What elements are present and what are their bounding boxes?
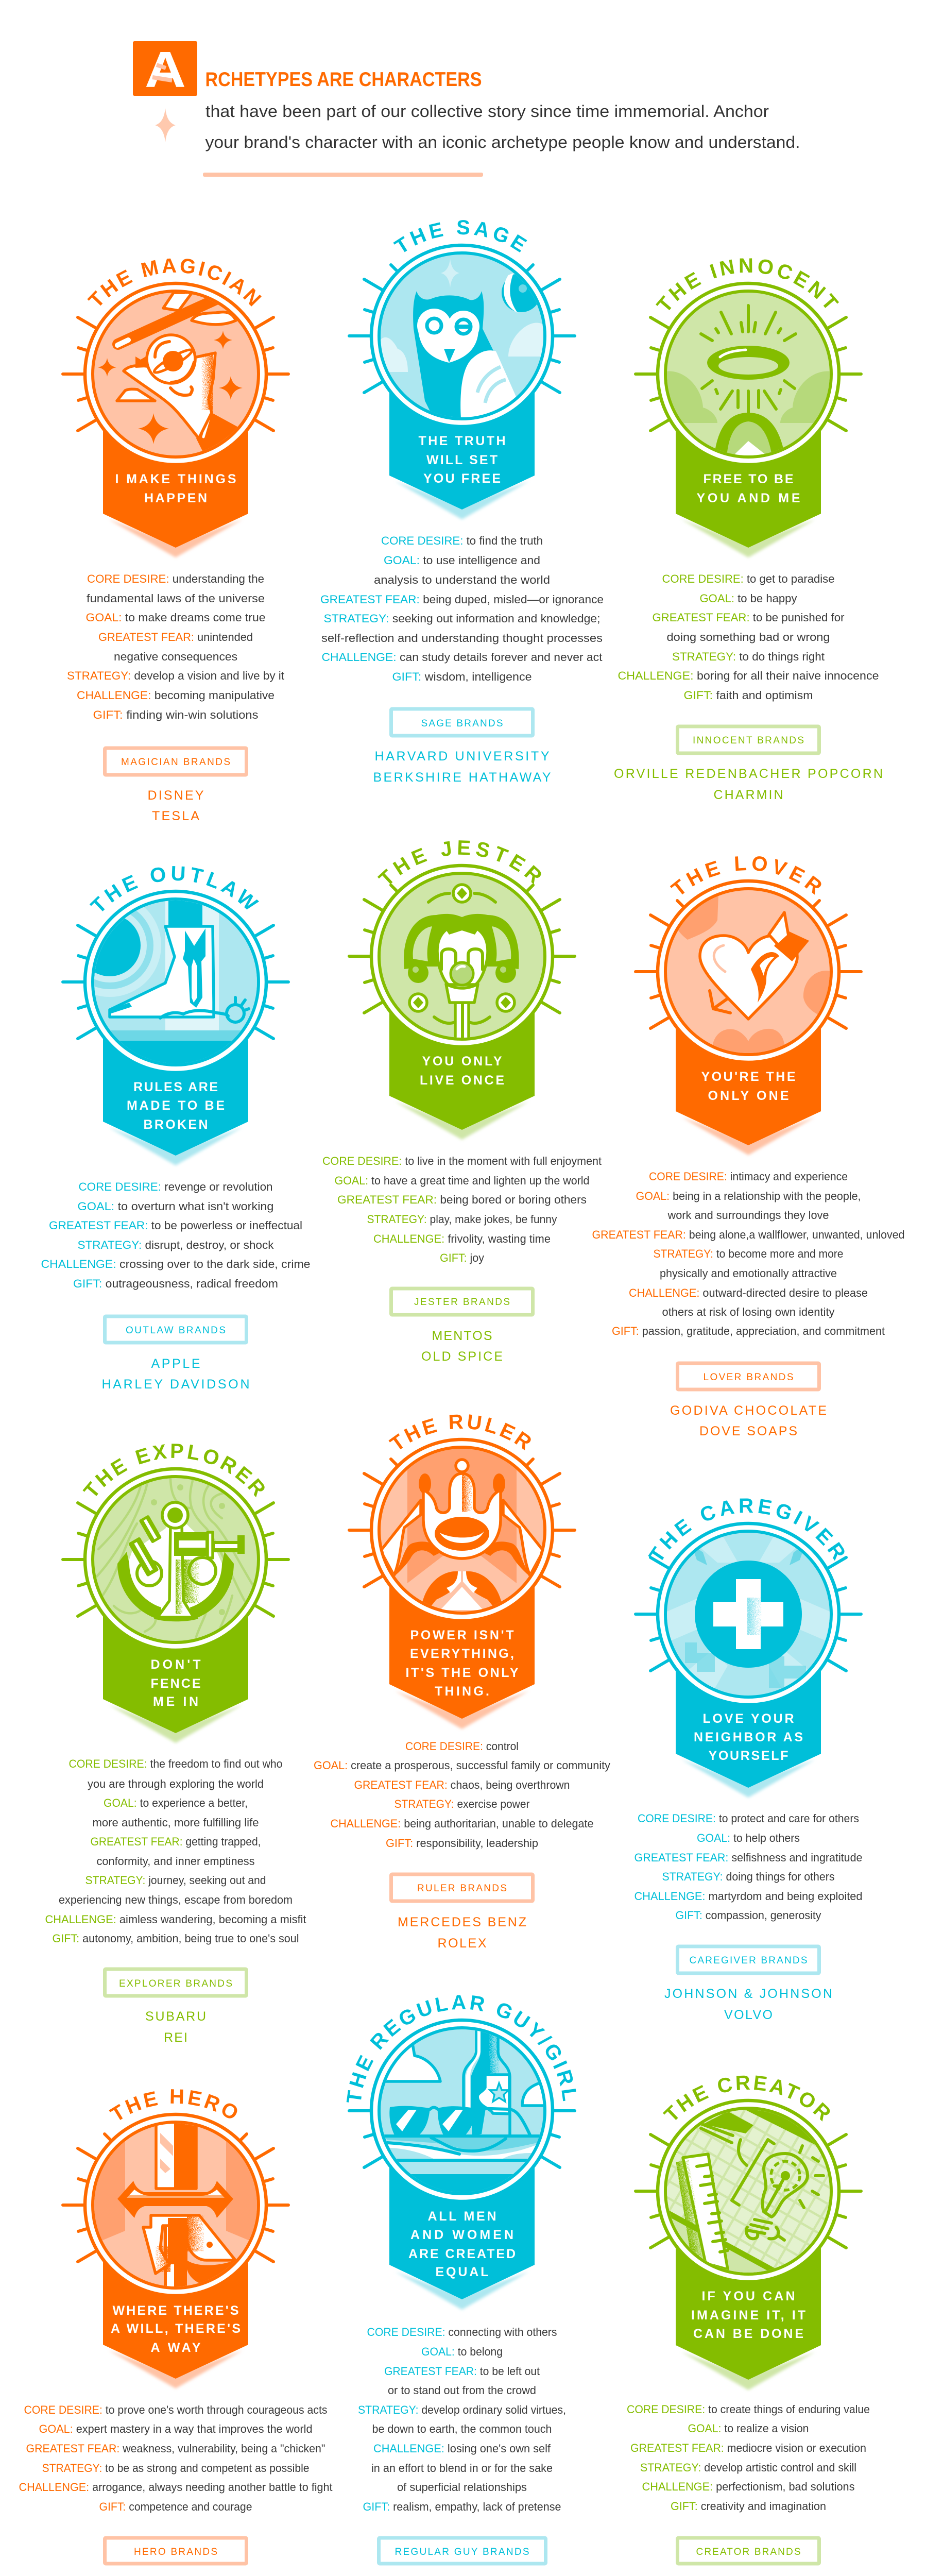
traits text: more authentic, more fulfilling life [93,1816,259,1829]
traits text: GOAL: to belong [421,2345,503,2358]
traits text [320,534,604,683]
traits text: GREATEST FEAR: getting trapped, [91,1835,261,1848]
intro text: that have been part of our collective story since time immemorial. Anchor [205,102,769,121]
traits text [592,1170,904,1337]
traits text [41,1180,310,1290]
traits text: CHALLENGE: perfectionism, bad solutions [642,2480,855,2493]
traits text: GOAL: expert mastery in a way that improves the world [39,2422,312,2435]
traits text: STRATEGY: to be as strong and competent as possible [42,2462,309,2475]
traits text: GIFT: passion, gratitude, appreciation, and commitment [612,1325,885,1337]
title: THE JESTER [377,840,541,884]
brands box: INNOCENT BRANDS [693,735,804,746]
traits text: STRATEGY: play, make jokes, be funny [367,1213,557,1226]
intro text: your brand's character with an iconic archetype people know and understand. [205,133,800,151]
traits text: STRATEGY: to become more and more [653,1247,844,1260]
banner motto [701,1070,795,1103]
panel: the lover [592,856,904,1438]
banner motto [408,2209,516,2279]
icon: sparkle [155,108,176,142]
traits text: GOAL: to be happy [699,592,797,605]
brands box [391,709,533,736]
banner motto: POWER ISN'T [410,1628,514,1642]
brand names: CHARMIN [714,788,783,802]
banner motto: BROKEN [143,1117,208,1132]
banner motto [111,2303,241,2355]
banner motto [406,1628,519,1699]
brand names [670,1403,827,1438]
brand names: DISNEY [147,788,204,803]
panel: the hero [19,2089,333,2566]
traits text: STRATEGY: seeking out information and knowledge; [323,612,601,625]
badge: creator emblem [636,2100,861,2390]
traits text: GIFT: joy [440,1251,484,1264]
traits text: CHALLENGE: becoming manipulative [77,689,275,702]
traits text: CORE DESIRE: connecting with others [367,2326,557,2338]
brand names: SUBARU [145,2009,206,2024]
traits text: CORE DESIRE: to get to paradise [662,572,834,585]
brands box: LOVER BRANDS [704,1372,793,1383]
brand names [145,2009,206,2045]
traits text: STRATEGY: exercise power [395,1798,529,1810]
traits text: CHALLENGE: aimless wandering, becoming a misfit [45,1913,306,1926]
brands box: EXPLORER BRANDS [119,1978,232,1989]
title: THE LOVER [670,856,821,895]
traits text: CORE DESIRE: to create things of enduring value [627,2403,870,2416]
brands box [391,1289,533,1315]
traits text: GREATEST FEAR: being duped, misled—or ignorance [320,593,604,606]
brands box: JESTER BRANDS [414,1297,510,1308]
brand names: MERCEDES BENZ [398,1915,526,1929]
banner motto: WHERE THERE'S [112,2303,239,2318]
heading: RCHETYPES ARE CHARACTERS [205,69,482,91]
brand names [614,767,883,802]
banner motto: YOU AND ME [696,491,800,505]
banner motto: LIVE ONCE [420,1073,504,1088]
traits text: GIFT: autonomy, ambition, being true to one's soul [53,1932,299,1945]
title: THE EXPLORER [82,1444,265,1497]
panel: the explorer [45,1444,306,2045]
banner motto: I MAKE THINGS [115,472,236,486]
banner motto [694,1711,803,1763]
divider bar [203,173,483,177]
traits text: GOAL: to have a great time and lighten up the world [335,1174,589,1187]
brand names: VOLVO [724,2008,773,2022]
traits text: GREATEST FEAR: to be powerless or ineffectual [49,1219,302,1232]
brands box: RULER BRANDS [417,1883,507,1894]
banner motto: CAN BE DONE [693,2327,803,2341]
traits text: GOAL: being in a relationship with the people, [636,1190,861,1202]
panel: the innocent [614,258,883,802]
brand names [421,1329,503,1364]
brand names: MENTOS [432,1329,492,1343]
traits text: others at risk of losing own identity [662,1306,834,1318]
traits text: GIFT: realism, empathy, lack of pretense [363,2500,561,2513]
banner motto: FENCE [150,1676,201,1691]
brand names: APPLE [151,1357,200,1371]
banner motto [418,434,506,486]
traits text: CHALLENGE: outward-directed desire to please [629,1286,868,1299]
traits text [19,2403,333,2513]
banner motto: HAPPEN [144,491,207,505]
brands box: HERO BRANDS [134,2547,217,2557]
banner motto: YOU FREE [423,471,501,486]
traits text: GOAL: to make dreams come true [85,611,266,624]
brands box [678,1363,819,1389]
title: THE MAGICIAN [87,259,262,307]
title: THE HERO [109,2089,237,2120]
brands box: CAREGIVER BRANDS [689,1955,808,1966]
brand names: TESLA [152,809,199,823]
brand names: HARLEY DAVIDSON [102,1377,249,1392]
brands box: CREATOR BRANDS [696,2547,800,2557]
traits text: GIFT: finding win-win solutions [93,708,259,721]
panel: the creator [627,2075,870,2566]
brand names: GODIVA CHOCOLATE [670,1403,827,1418]
traits text: GREATEST FEAR: weakness, vulnerability, being a "chicken" [26,2442,325,2455]
traits text: CORE DESIRE: to prove one's worth through courageous acts [24,2403,328,2416]
traits text: GREATEST FEAR: to be punished for [652,611,845,624]
traits text: GREATEST FEAR: unintended [98,631,253,643]
traits text: CORE DESIRE: control [405,1740,519,1753]
traits text: experiencing new things, escape from boredom [59,1893,293,1906]
brand names [147,788,204,823]
header: archetypes are characters [133,41,800,177]
panel: the ruler [314,1414,610,1951]
title: THE INNOCENT [656,258,839,310]
traits text: CORE DESIRE: intimacy and experience [649,1170,848,1183]
panel: the jester [322,840,602,1364]
brand names [102,1357,249,1392]
traits text: GIFT: compassion, generosity [676,1909,821,1922]
badge: explorer emblem [63,1469,288,1743]
panel: the outlaw [41,866,310,1392]
banner motto [127,1080,225,1132]
title: THE OUTLAW [90,866,259,911]
traits text: GOAL: to realize a vision [688,2422,809,2435]
traits text: GIFT: wisdom, intelligence [392,670,531,683]
badge: innocent emblem [636,283,861,557]
traits text: CORE DESIRE: revenge or revolution [78,1180,273,1193]
traits text: GOAL: to experience a better, [104,1797,248,1809]
banner motto: DON'T [150,1657,201,1672]
banner motto: IMAGINE IT, IT [691,2308,805,2323]
title: THE SAGE [393,220,527,252]
panel: the regular guy/girl [346,1995,576,2566]
traits text: GIFT: faith and optimism [684,689,813,702]
traits text: GREATEST FEAR: being alone,a wallflower, unwanted, unloved [592,1228,904,1241]
title: THE CREATOR [663,2075,830,2122]
brands box [105,2538,246,2564]
badge: lover emblem [636,881,861,1155]
brand names: OLD SPICE [421,1349,503,1364]
brand names: ORVILLE REDENBACHER POPCORN [614,767,883,781]
traits text [627,2403,870,2513]
banner motto: YOURSELF [709,1749,788,1763]
traits text: you are through exploring the world [88,1777,264,1790]
traits text: CORE DESIRE: understanding the [87,572,264,585]
badge: caregiver emblem [636,1523,861,1798]
brands box [105,748,246,775]
badge: jester emblem [349,866,575,1140]
traits text: analysis to understand the world [374,573,550,586]
traits text: CHALLENGE: losing one's own self [373,2442,551,2455]
traits text: GIFT: outrageousness, radical freedom [73,1277,278,1290]
banner motto: NEIGHBOR AS [694,1730,803,1744]
traits text: CHALLENGE: frivolity, wasting time [373,1232,551,1245]
title: THE RULER [388,1414,531,1450]
traits text: CHALLENGE: can study details forever and never act [321,651,603,664]
traits text: GOAL: to use intelligence and [384,554,540,567]
banner motto: FREE TO BE [704,472,793,486]
icon: letter A tile: A [145,41,186,98]
traits text: conformity, and inner emptiness [97,1855,254,1868]
traits text: or to stand out from the crowd [388,2384,536,2397]
banner motto: ALL MEN [427,2209,496,2224]
panel: the magician [61,259,290,823]
brand names [664,1987,832,2022]
banner motto: EQUAL [436,2265,488,2279]
traits text: GREATEST FEAR: mediocre vision or execution [630,2442,866,2454]
intro text [205,102,800,151]
brand names: BERKSHIRE HATHAWAY [373,770,551,785]
traits text [358,2326,566,2513]
badge: outlaw emblem [58,891,288,1165]
banner motto: RULES ARE [133,1080,218,1094]
traits text: work and surroundings they love [667,1209,829,1222]
traits text: doing something bad or wrong [666,631,830,643]
traits text: fundamental laws of the universe [87,592,265,605]
brands box [105,1316,246,1343]
badge: magician emblem [63,283,288,557]
title: THE CAREGIVER [648,1498,845,1561]
traits text [322,1155,602,1264]
banner motto [115,472,236,505]
banner motto: AND WOMEN [410,2228,513,2242]
banner motto: YOU'RE THE [701,1070,795,1084]
badge: regular guy emblem [349,2020,575,2310]
title: THE REGULAR GUY/GIRL [346,1995,576,2103]
panel: the caregiver [634,1498,863,2022]
traits text: of superficial relationships [397,2481,527,2494]
traits text: CHALLENGE: crossing over to the dark side, crime [41,1258,310,1270]
traits text: GREATEST FEAR: selfishness and ingratitude [635,1851,862,1864]
traits text: CORE DESIRE: to live in the moment with full enjoyment [322,1155,602,1167]
traits text: STRATEGY: disrupt, destroy, or shock [77,1239,275,1251]
banner motto: IF YOU CAN [701,2289,795,2303]
brands box: REGULAR GUY BRANDS [395,2547,529,2557]
traits text: GOAL: to help others [697,1832,800,1844]
banner motto [150,1657,201,1709]
brands box [105,1969,246,1996]
banner motto: THING. [435,1684,489,1699]
brand names: JOHNSON & JOHNSON [664,1987,832,2001]
banner motto: MADE TO BE [127,1098,225,1113]
brands box [678,1946,819,1973]
brand names: DOVE SOAPS [699,1424,797,1438]
traits text: GIFT: competence and courage [99,2500,252,2513]
traits text: CHALLENGE: being authoritarian, unable to delegate [331,1817,593,1830]
banner motto: IT'S THE ONLY [406,1666,519,1680]
traits text: GREATEST FEAR: to be left out [384,2365,540,2378]
brand names: HARVARD UNIVERSITY [375,749,550,764]
banner motto [691,2289,805,2341]
traits text: CORE DESIRE: to find the truth [381,534,543,547]
brands box [678,726,819,753]
traits text: STRATEGY: journey, seeking out and [85,1874,266,1887]
traits text: STRATEGY: develop ordinary solid virtues, [358,2403,566,2416]
traits text: GOAL: create a prosperous, successful family or community [314,1759,610,1772]
brand names: ROLEX [438,1936,487,1951]
badge: sage emblem [349,245,575,519]
traits text [314,1740,610,1850]
banner motto: ONLY ONE [708,1089,789,1103]
brands box: OUTLAW BRANDS [126,1325,226,1336]
banner motto: ARE CREATED [408,2247,516,2261]
banner motto: YOU ONLY [422,1054,502,1069]
traits text: GIFT: responsibility, leadership [386,1837,538,1850]
traits text: be down to earth, the common touch [372,2422,552,2435]
traits text: CHALLENGE: arrogance, always needing another battle to fight [19,2481,333,2494]
banner motto: WILL SET [426,453,498,467]
brands box: MAGICIAN BRANDS [121,757,230,768]
traits text: negative consequences [114,650,237,663]
brands box [678,2538,819,2564]
traits text: STRATEGY: doing things for others [662,1870,834,1883]
traits text: GREATEST FEAR: being bored or boring others [337,1193,587,1206]
traits text [635,1812,862,1922]
traits text: in an effort to blend in or for the sake [371,2462,553,2475]
traits text: STRATEGY: to do things right [672,650,825,663]
banner motto: A WILL, THERE'S [111,2321,241,2336]
brands box [379,2538,546,2564]
brand names [373,749,551,785]
traits text: physically and emotionally attractive [660,1267,837,1280]
banner motto [696,472,800,505]
traits text: GOAL: to overturn what isn't working [77,1200,274,1213]
brands box: SAGE BRANDS [421,718,503,729]
traits text: CHALLENGE: martyrdom and being exploited [635,1890,862,1903]
banner motto: LOVE YOUR [702,1711,794,1726]
badge: hero emblem [63,2114,288,2388]
brands box [391,1874,533,1901]
badge: ruler emblem [349,1439,575,1729]
traits text: CORE DESIRE: to protect and care for others [638,1812,859,1825]
panel: the sage [320,220,604,785]
traits text: self-reflection and understanding thought processes [321,632,603,645]
banner motto [420,1054,504,1088]
traits text [67,572,284,721]
traits text: GREATEST FEAR: chaos, being overthrown [354,1778,570,1791]
traits text [45,1757,306,1945]
icon: letter A tile [133,41,197,98]
banner motto: ME IN [153,1694,198,1709]
traits text: CHALLENGE: boring for all their naive innocence [618,669,879,682]
traits text: CORE DESIRE: the freedom to find out who [69,1757,282,1770]
traits text: STRATEGY: develop a vision and live by it [67,669,284,682]
banner motto: THE TRUTH [418,434,506,448]
traits text [618,572,879,702]
traits text: STRATEGY: develop artistic control and skill [640,2461,856,2474]
brand names: REI [164,2030,187,2045]
banner motto: A WAY [150,2341,201,2355]
traits text: GIFT: creativity and imagination [671,2500,826,2513]
brand names [398,1915,526,1951]
banner motto: EVERYTHING, [410,1647,514,1661]
